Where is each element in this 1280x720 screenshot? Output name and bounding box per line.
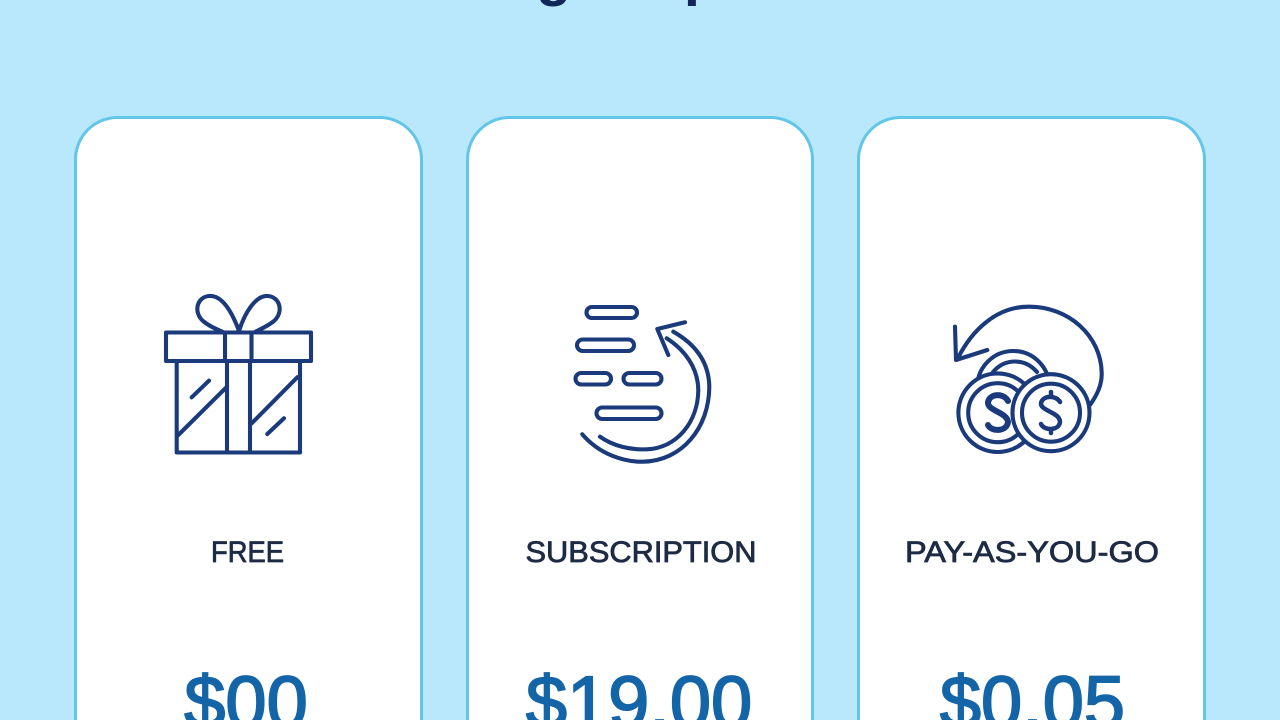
panel: subscription plan (468, 118, 812, 720)
plan name: subscription: SUBSCRIPTION (526, 536, 756, 569)
panel: free plan (76, 118, 422, 720)
panel: pay-as-you-go plan (858, 118, 1204, 720)
icon: gift box (166, 296, 311, 452)
icon: coins with return arrow (955, 307, 1102, 452)
plan name: pay-as-you-go: PAY-AS-YOU-GO (905, 536, 1159, 569)
icon: recurring list (576, 307, 709, 462)
plan name: free: FREE (211, 536, 284, 569)
